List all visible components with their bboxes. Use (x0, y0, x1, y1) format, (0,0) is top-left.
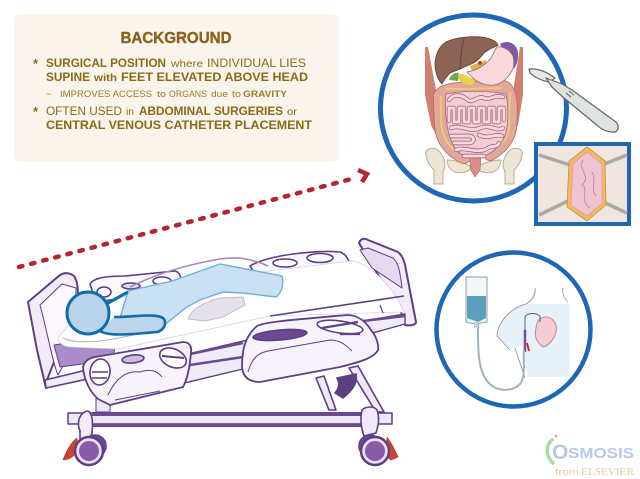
neck (108, 292, 128, 303)
tube (478, 323, 524, 390)
incision (567, 147, 606, 221)
panel: background (14, 14, 339, 162)
text block: common uses (33, 104, 312, 132)
rectum (469, 155, 481, 177)
logo: osmosis (547, 434, 634, 478)
text block: common uses: in (126, 107, 134, 118)
torso (497, 288, 570, 377)
far rail (90, 271, 181, 302)
text block: gravity note: to (157, 89, 166, 99)
patient (67, 258, 283, 335)
hospital bed (28, 239, 416, 465)
near foot rail (242, 315, 378, 382)
mattress (58, 261, 404, 349)
text block: definition (33, 56, 308, 84)
inset: surgical incision (536, 144, 629, 224)
near head rail (83, 342, 191, 405)
text block: definition: SUPINE (46, 72, 90, 84)
arrow: dashed red (19, 170, 367, 267)
frame under mattress (120, 314, 405, 396)
text block: gravity note: ORGANS (169, 89, 207, 100)
head (67, 292, 109, 334)
torso (115, 264, 283, 335)
right caster (386, 437, 398, 460)
text block: definition: SURGICAL POSITION (46, 58, 166, 70)
text block: definition: with (93, 73, 117, 84)
left caster (63, 438, 78, 460)
logo: osmosis: from (555, 467, 579, 478)
text block: gravity note: ~ (46, 89, 51, 99)
stomach (467, 47, 514, 85)
text block: common uses: OFTEN USED (46, 106, 122, 118)
arm (100, 315, 165, 334)
text block: definition: INDIVIDUAL LIES (207, 58, 306, 70)
text block: common uses: * (33, 104, 39, 119)
head board (28, 273, 78, 388)
retractors (539, 155, 627, 215)
text block: common uses: ABDOMINAL SURGERIES (139, 106, 283, 118)
pelvis and femurs (426, 148, 522, 184)
iv bag (466, 277, 487, 324)
text block: gravity note (46, 89, 288, 100)
circle: abdominal organs (380, 15, 566, 201)
right support legs (316, 366, 384, 412)
liver (435, 37, 498, 84)
text block: common uses: CENTRAL VENOUS CATHETER PLACEMENT (46, 120, 312, 132)
heading: background: BACKGROUND (120, 30, 232, 47)
heart (535, 317, 556, 347)
gray body shadow (188, 297, 245, 321)
text block: gravity note: IMPROVES ACCESS (60, 89, 152, 100)
foot board (359, 239, 416, 325)
small intestine (445, 91, 508, 157)
icon: scalpel (529, 69, 618, 132)
text block: definition: * (33, 56, 39, 71)
logo: osmosis: O (552, 441, 568, 464)
text block: common uses: or (287, 107, 298, 118)
spleen (500, 42, 518, 69)
text block: definition: FEET ELEVATED ABOVE HEAD (121, 72, 308, 84)
logo: osmosis: SMOSIS (568, 445, 634, 462)
legs outline (130, 258, 268, 287)
text block: gravity note: GRAVITY (243, 89, 288, 100)
purple head pad (54, 335, 118, 367)
logo: osmosis: ELSEVIER (581, 467, 634, 478)
colon (440, 87, 511, 157)
text block: gravity note: to (232, 89, 241, 99)
gallbladder and pancreas (449, 73, 459, 81)
text block: definition: where (170, 59, 203, 70)
catheter (525, 314, 540, 350)
circle: central venous catheter (436, 252, 590, 406)
text block: gravity note: due (211, 89, 228, 99)
base frame (68, 413, 392, 424)
muscles (425, 47, 523, 137)
